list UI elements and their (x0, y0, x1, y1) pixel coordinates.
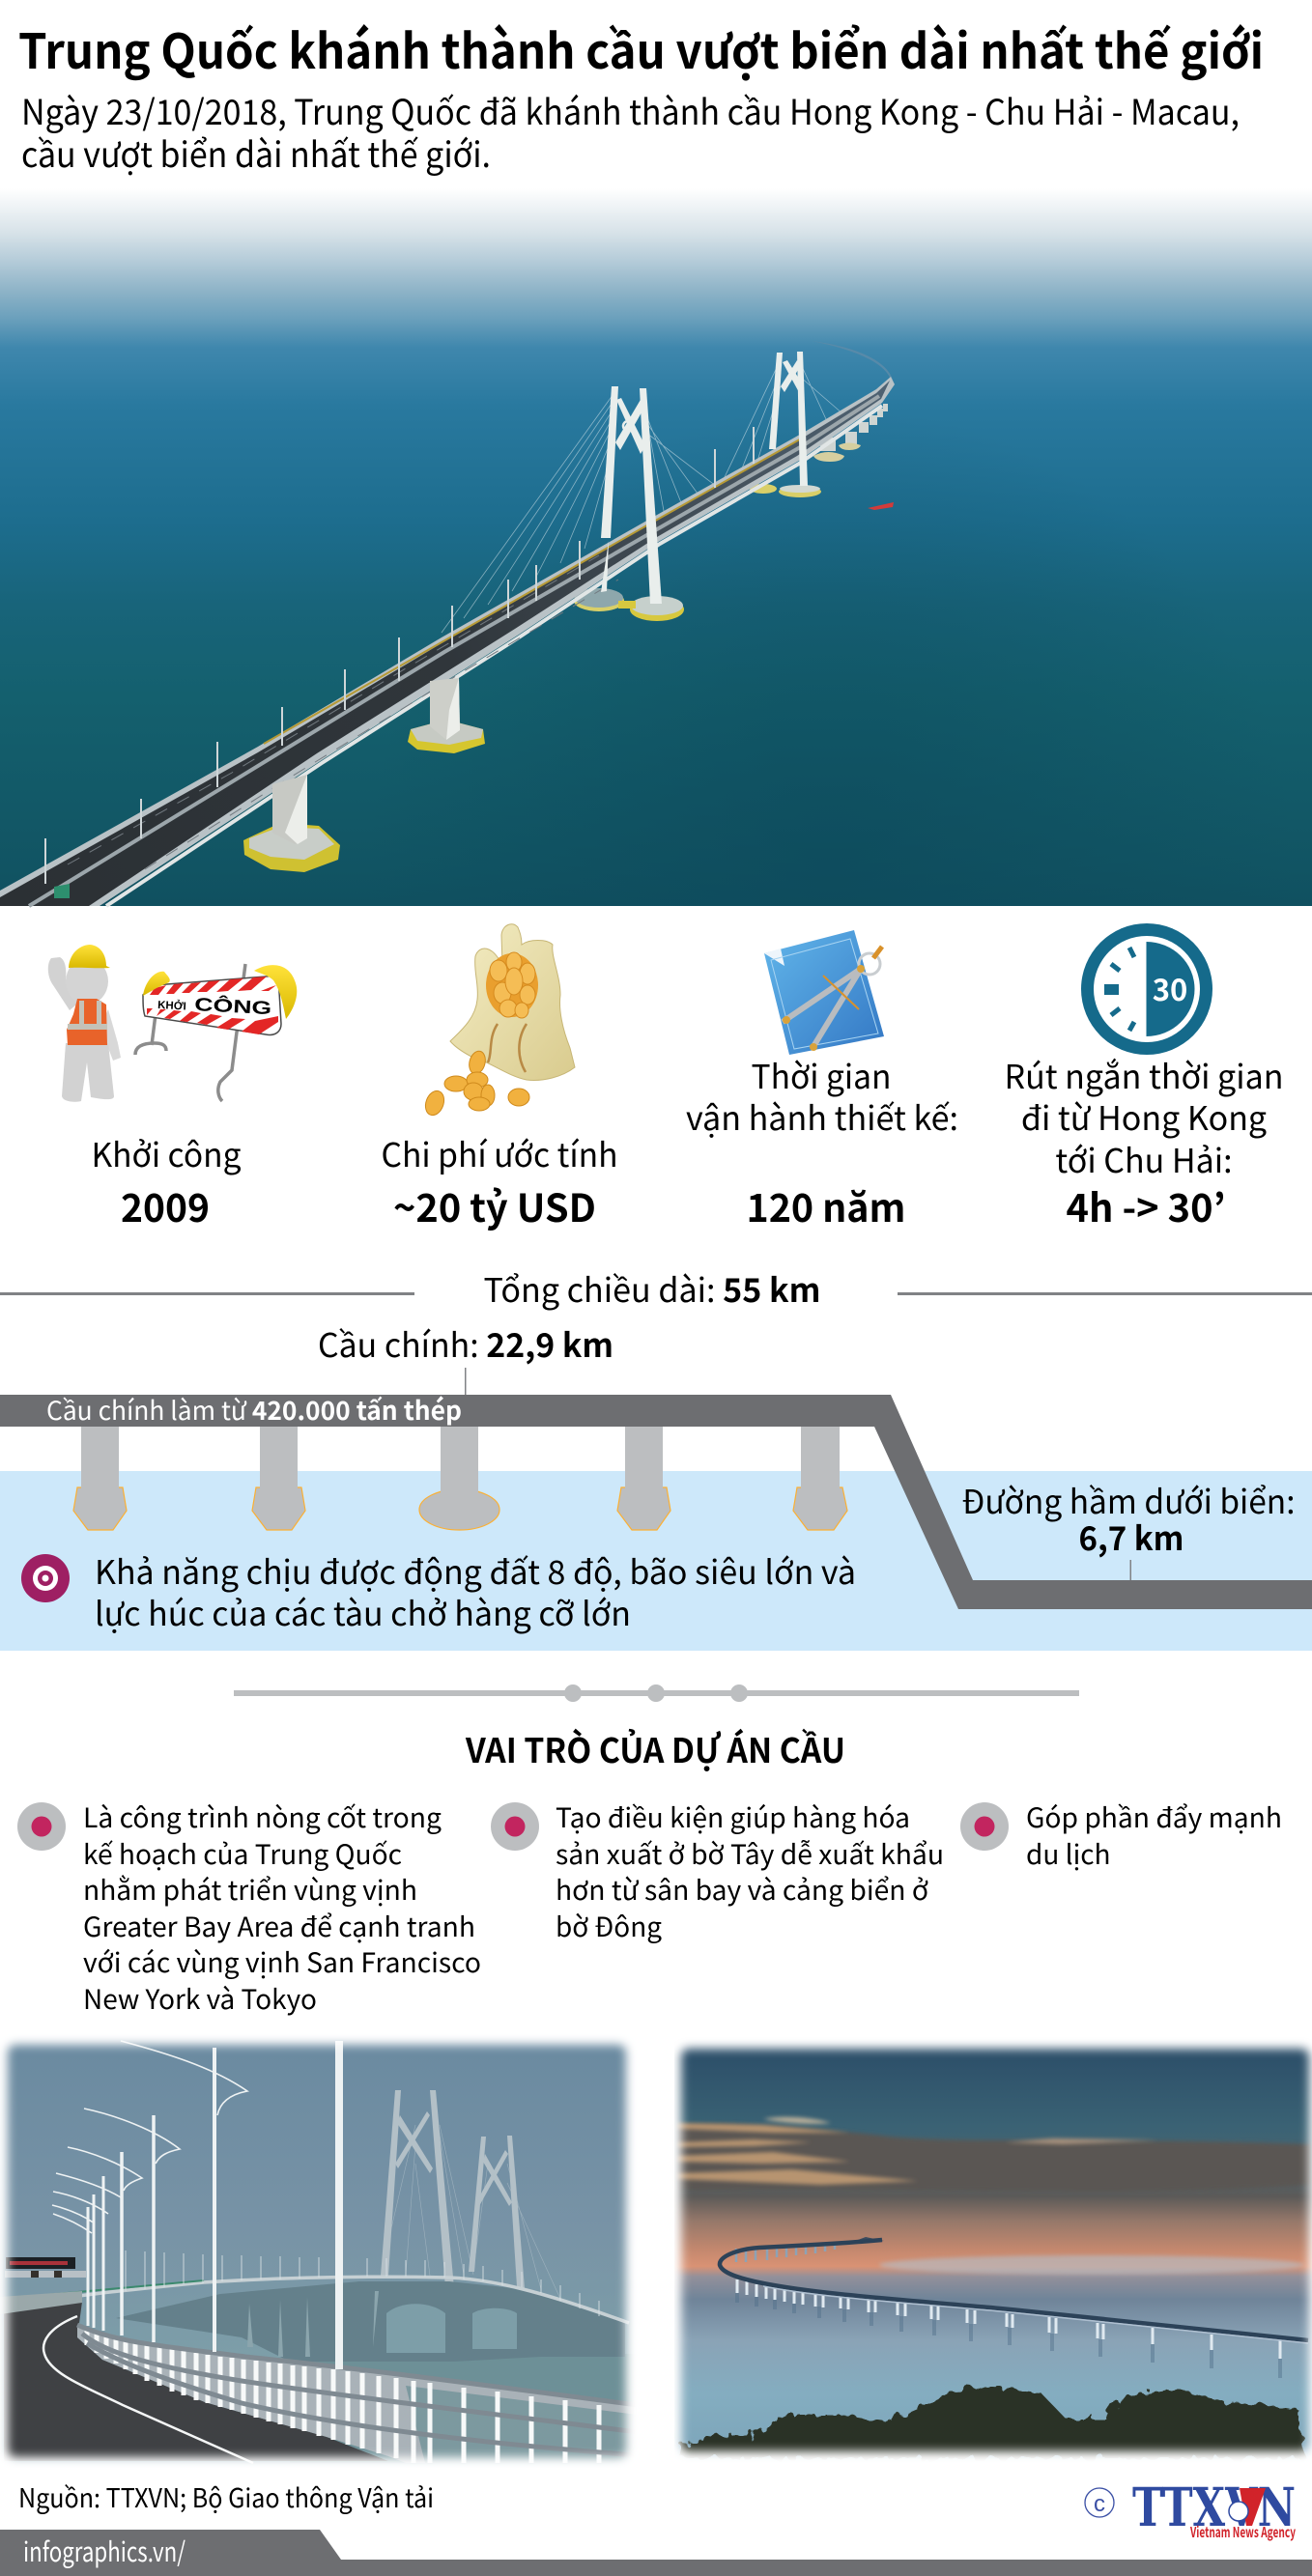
stat: travel time saved: 4h -> 30’ (1067, 1177, 1225, 1233)
role item 2: bờ Đông (556, 1907, 662, 1945)
lamp posts (52, 2041, 339, 2369)
guardrail (77, 2325, 638, 2463)
role item 1: Là công trình nòng cốt trong (83, 1798, 442, 1836)
stat: travel time saved (1005, 1051, 1283, 1233)
bridge piers diagram (73, 1427, 847, 1530)
piers (736, 2244, 1280, 2359)
bullet 1 (17, 1802, 66, 1851)
main bridge length label: Cầu chính: 22,9 km (318, 1319, 613, 1367)
pier 2 (252, 1427, 305, 1530)
icon: clock showing 30: 30 (1153, 966, 1187, 1009)
role item 2: hơn từ sân bay và cảng biển ở (556, 1870, 928, 1909)
far towers upper legs (381, 2090, 525, 2287)
deck edge (4, 2277, 629, 2323)
photo: sunset over the curving bridge (674, 2033, 1312, 2468)
heading: role of the bridge project: VAI TRÒ CỦA DỰ ÁN CẦU (465, 1724, 845, 1773)
role item 2: Tạo điều kiện giúp hàng hóa (556, 1798, 910, 1836)
far headland (858, 2237, 884, 2241)
footer bar with site name (0, 2530, 1312, 2576)
sign board: CÔNG (194, 994, 272, 1019)
towers (601, 352, 808, 604)
copyright mark (1085, 2488, 1114, 2517)
sign board (143, 976, 281, 1034)
intro text: Ngày 23/10/2018, Trung Quốc đã khánh thành cầu Hong Kong - Chu Hải - Macau, (21, 85, 1240, 135)
bridge and tunnel profile (0, 1390, 1312, 1609)
icon: bag of gold coins (422, 924, 575, 1118)
stat: design life: Thời gian (752, 1051, 891, 1098)
piers A and B (243, 678, 485, 872)
role item 1: nhằm phát triển vùng vịnh (83, 1870, 417, 1909)
stat: construction start (91, 1129, 242, 1233)
sign board: KHỞI (157, 999, 186, 1013)
role item 2 (491, 1798, 944, 1945)
road surface (4, 2302, 388, 2461)
role item 3 (960, 1798, 1282, 1873)
bridge and tunnel profile: Cầu chính làm từ 420.000 tấn thép (46, 1390, 462, 1428)
pier 5 (793, 1427, 847, 1530)
water (315, 2354, 626, 2457)
stat: estimated cost (381, 1129, 618, 1233)
worker (48, 945, 121, 1102)
stat: construction start: 2009 (121, 1177, 210, 1233)
total length label with rules: Tổng chiều dài: 55 km (483, 1264, 821, 1312)
hero photo: bridge over the sea (0, 155, 1312, 906)
icon: worker and construction sign (48, 945, 297, 1102)
role item 1: kế hoạch của Trung Quốc (83, 1834, 402, 1873)
pier 1 (73, 1427, 127, 1530)
total length label with rules (0, 1264, 1312, 1312)
pier reflections (737, 2293, 1280, 2378)
stat: design life: 120 năm (746, 1177, 906, 1233)
bullet 2 (491, 1802, 539, 1851)
far deck fade (812, 341, 894, 384)
resilience note: Khả năng chịu được động đất 8 độ, bão siêu lớn và (95, 1546, 856, 1594)
stat: design life: vận hành thiết kế: (686, 1092, 958, 1140)
bridge deck (0, 377, 895, 906)
footer bar with site name: infographics.vn/ (23, 2532, 185, 2570)
role item 1: Greater Bay Area để cạnh tranh (83, 1907, 475, 1945)
pier 3 (419, 1427, 499, 1530)
stat: travel time saved: Rút ngắn thời gian (1005, 1051, 1283, 1098)
viaduct underside (116, 2281, 625, 2362)
icon: target bullet (21, 1554, 70, 1602)
tower cables (391, 2125, 560, 2298)
small piers (813, 404, 888, 462)
role item 1 (17, 1798, 481, 2018)
stat: estimated cost: ~20 tỷ USD (393, 1177, 596, 1233)
role item 3: Góp phần đẩy mạnh (1026, 1798, 1282, 1836)
stat: travel time saved: tới Chu Hải: (1055, 1135, 1233, 1182)
far railing (126, 2250, 599, 2316)
photo: road on the bridge with lamp posts (0, 2033, 642, 2468)
stat: estimated cost: Chi phí ước tính (381, 1129, 618, 1176)
stat: travel time saved: đi từ Hong Kong (1021, 1092, 1267, 1140)
resilience note: lực húc của các tàu chở hàng cỡ lớn (95, 1588, 631, 1635)
tower foundations (574, 484, 821, 621)
bright sea band (879, 2255, 1304, 2275)
copyright mark: c (1094, 2491, 1105, 2517)
pier 4 (617, 1427, 670, 1530)
resilience note (95, 1546, 856, 1635)
overhead sign (5, 2257, 86, 2278)
icon: clock showing 30 (1081, 923, 1212, 1055)
intro text (21, 85, 1240, 178)
tunnel label: Đường hầm dưới biển: (962, 1476, 1295, 1523)
role item 2: sản xuất ở bờ Tây dễ xuất khẩu (556, 1834, 944, 1873)
bridge deck curve (720, 2240, 1308, 2340)
bridge cables (442, 359, 850, 633)
helmets on sign (143, 972, 170, 996)
bushes (682, 2386, 1306, 2458)
source line: Nguồn: TTXVN; Bộ Giao thông Vận tải (18, 2477, 434, 2515)
role item 1: với các vùng vịnh San Francisco (83, 1942, 481, 1981)
road edge line (43, 2316, 253, 2463)
stat: construction start: Khởi công (91, 1129, 242, 1176)
tunnel label (962, 1476, 1295, 1580)
tunnel label: 6,7 km (1078, 1513, 1184, 1560)
stat: design life (686, 1051, 958, 1233)
sea band (0, 1471, 1312, 1651)
logo: TTXVN Vietnam News Agency (1085, 2476, 1296, 2542)
role item 1: New York và Tokyo (83, 1979, 317, 2018)
intro text: cầu vượt biển dài nhất thế giới. (21, 127, 491, 178)
bullet 3 (960, 1802, 1009, 1851)
title: Trung Quốc khánh thành cầu vượt biển dài nhất thế giới (18, 14, 1264, 83)
sign posts (135, 964, 245, 1101)
clouds (676, 2117, 1312, 2192)
section divider with dots (234, 1684, 1079, 1702)
icon: blueprint and compass (764, 930, 884, 1055)
boat (868, 502, 894, 510)
role item 3: du lịch (1026, 1834, 1111, 1873)
